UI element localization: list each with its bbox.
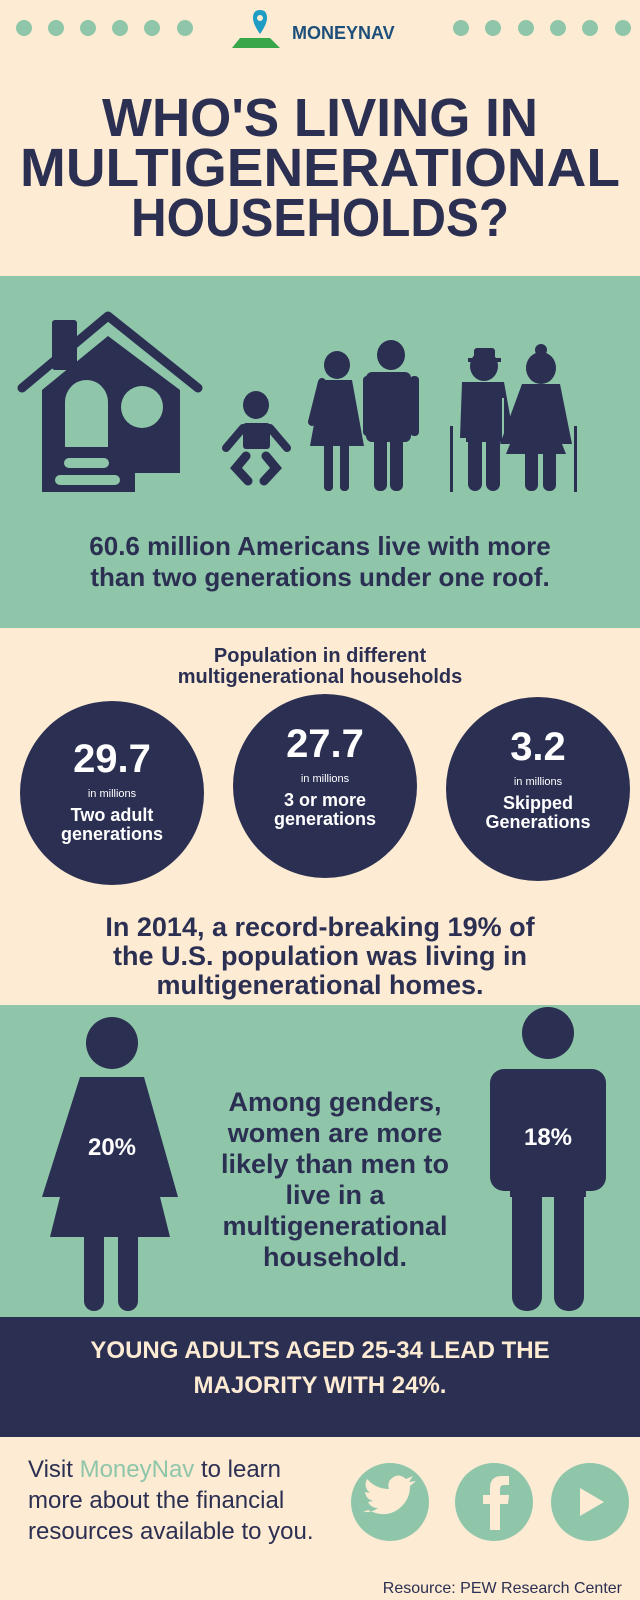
heading: population: multigenerational households xyxy=(178,666,462,688)
circles: population stats xyxy=(20,694,630,885)
icons: house and family xyxy=(18,312,577,492)
icons: social xyxy=(351,1463,629,1541)
icon: man 18%: 18% xyxy=(524,1124,572,1151)
title: WHO'S LIVING IN xyxy=(102,88,538,148)
footer text: Visit MoneyNav to learn xyxy=(28,1456,281,1483)
title xyxy=(20,88,620,248)
old man xyxy=(470,351,498,381)
circle: 3 or more: 3 or more xyxy=(284,790,366,810)
text: genders: likely than men to xyxy=(221,1149,449,1179)
header dots and logo xyxy=(16,10,631,48)
circle: skipped: 3.2 xyxy=(510,725,566,769)
text: 2014 record: In 2014, a record-breaking 19% of xyxy=(105,912,535,942)
title: HOUSEHOLDS? xyxy=(131,188,509,248)
old woman xyxy=(526,352,556,384)
woman xyxy=(324,351,350,379)
footer text: more about the financial xyxy=(28,1487,284,1514)
circle: two adult: generations xyxy=(61,824,163,844)
title: MULTIGENERATIONAL xyxy=(20,138,620,198)
circle: two adult: 29.7 xyxy=(73,737,151,781)
banner: young adults: MAJORITY WITH 24%. xyxy=(194,1372,446,1399)
text: 60.6 million: than two generations under one roof. xyxy=(90,562,550,592)
text: genders: household. xyxy=(263,1242,407,1272)
text: genders: live in a xyxy=(285,1180,385,1210)
circle: 3 or more: 27.7 xyxy=(286,722,364,766)
circle: skipped xyxy=(446,697,630,881)
text: genders: multigenerational xyxy=(222,1211,448,1241)
heading: population: Population in different xyxy=(214,645,426,667)
text: 2014 record: multigenerational homes. xyxy=(156,970,484,1000)
icon: woman 20% xyxy=(42,1017,178,1311)
circle: two adult: in millions xyxy=(88,788,136,800)
circle: 3 or more: in millions xyxy=(301,773,349,785)
text: 2014 record: the U.S. population was living in xyxy=(113,941,527,971)
header dots and logo: MONEYNAV xyxy=(292,23,395,43)
circle: two adult xyxy=(20,701,204,885)
circle: 3 or more: generations xyxy=(274,809,376,829)
circle: skipped: Skipped xyxy=(503,793,573,813)
circle: skipped: in millions xyxy=(514,776,562,788)
text: genders xyxy=(221,1087,449,1272)
baby xyxy=(243,391,269,419)
text: genders: women are more xyxy=(228,1118,442,1148)
man xyxy=(377,340,405,370)
text: genders: Among genders, xyxy=(228,1087,442,1117)
panel: generations xyxy=(0,276,640,628)
banner: young adults xyxy=(0,1317,640,1437)
circle: two adult: Two adult xyxy=(71,805,153,825)
resource credit: Resource: PEW Research Center xyxy=(383,1580,622,1597)
icon: woman 20%: 20% xyxy=(88,1134,136,1161)
banner: young adults: YOUNG ADULTS AGED 25-34 LEAD THE xyxy=(90,1337,550,1364)
text: 60.6 million xyxy=(89,531,551,592)
text: 2014 record xyxy=(105,912,535,1000)
circle: 3 or more xyxy=(233,694,417,878)
text: 60.6 million: 60.6 million Americans live with more xyxy=(89,531,551,561)
footer text xyxy=(28,1456,314,1545)
circle: skipped: Generations xyxy=(485,812,591,832)
footer text: resources available to you. xyxy=(28,1518,314,1545)
panel: genders xyxy=(0,1005,640,1317)
heading: population xyxy=(178,645,462,688)
icon: man 18% xyxy=(490,1007,606,1311)
